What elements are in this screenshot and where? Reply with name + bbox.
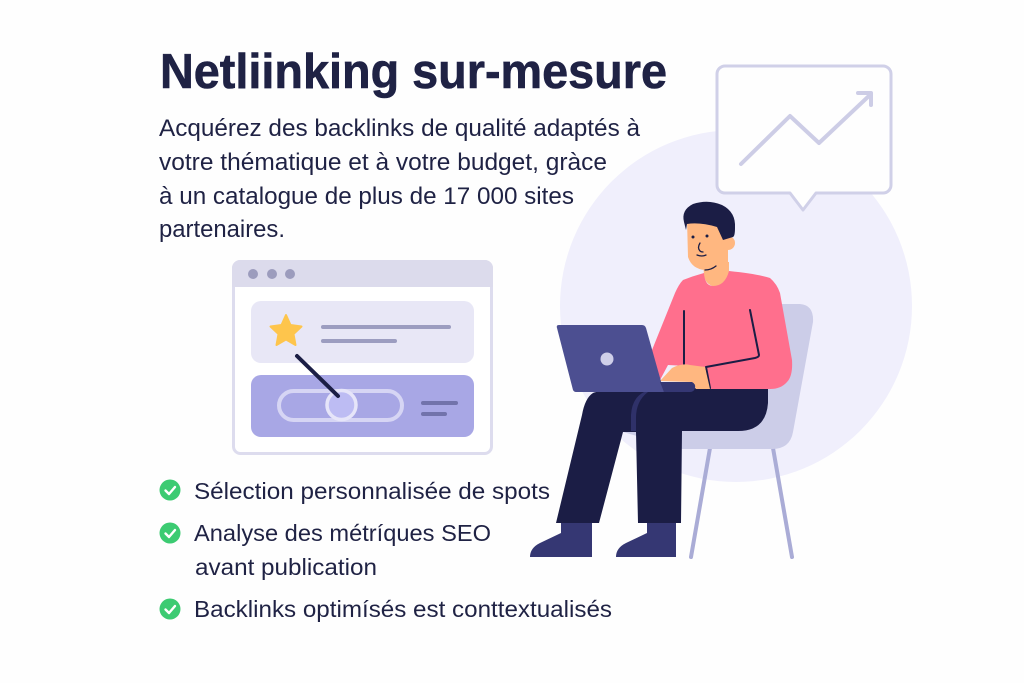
ear — [721, 236, 735, 250]
browser window illustration — [232, 260, 493, 454]
face features — [697, 243, 716, 270]
icon: green check — [160, 598, 180, 620]
intro text block: Acquérez des backlinks de qualité adaptés à — [159, 115, 641, 142]
title: Netliinking sur-mesure — [160, 45, 667, 99]
person on chair illustration — [530, 202, 813, 557]
link lines — [421, 401, 458, 416]
link knob — [327, 390, 356, 420]
sweater fold lines — [684, 310, 759, 388]
hair — [683, 202, 735, 240]
trousers — [556, 388, 768, 523]
icon: growth arrow — [741, 93, 871, 164]
icon: green check — [160, 480, 180, 500]
neck — [703, 262, 729, 286]
chair legs — [691, 448, 792, 557]
background circle — [560, 130, 912, 482]
inner leg shade — [631, 392, 648, 431]
pointer line — [297, 356, 338, 396]
laptop logo — [600, 352, 614, 366]
checklist — [160, 478, 612, 622]
intro text block: partenaires. — [159, 216, 285, 243]
laptop screen — [557, 325, 664, 392]
face — [687, 220, 728, 270]
intro text block: à un catalogue de plus de 17 000 sites — [159, 183, 574, 210]
browser title bar — [232, 260, 493, 287]
item: metrics: Analyse des métríques SEO — [194, 520, 491, 546]
icon: star — [270, 315, 302, 345]
sweater — [650, 271, 792, 389]
item: metrics — [160, 520, 491, 580]
intro text block: votre thématique et à votre budget, gràce — [159, 149, 607, 176]
window dots — [248, 269, 295, 279]
card: starred item — [251, 301, 474, 363]
card: link item — [251, 375, 474, 437]
icon: chain link pill — [279, 391, 402, 420]
item: backlinks: Backlinks optimísés est conttextualisés — [194, 596, 612, 622]
item: metrics: avant publication — [195, 554, 377, 580]
chair — [623, 304, 813, 449]
icon: green check — [160, 522, 180, 544]
hands — [660, 364, 710, 389]
card text lines — [321, 325, 451, 343]
intro text block — [159, 115, 641, 243]
laptop base — [660, 382, 695, 392]
speech bubble with growth chart — [717, 66, 891, 210]
shoes — [530, 522, 676, 557]
item: selection: Sélection personnalisée de spots — [194, 478, 550, 504]
